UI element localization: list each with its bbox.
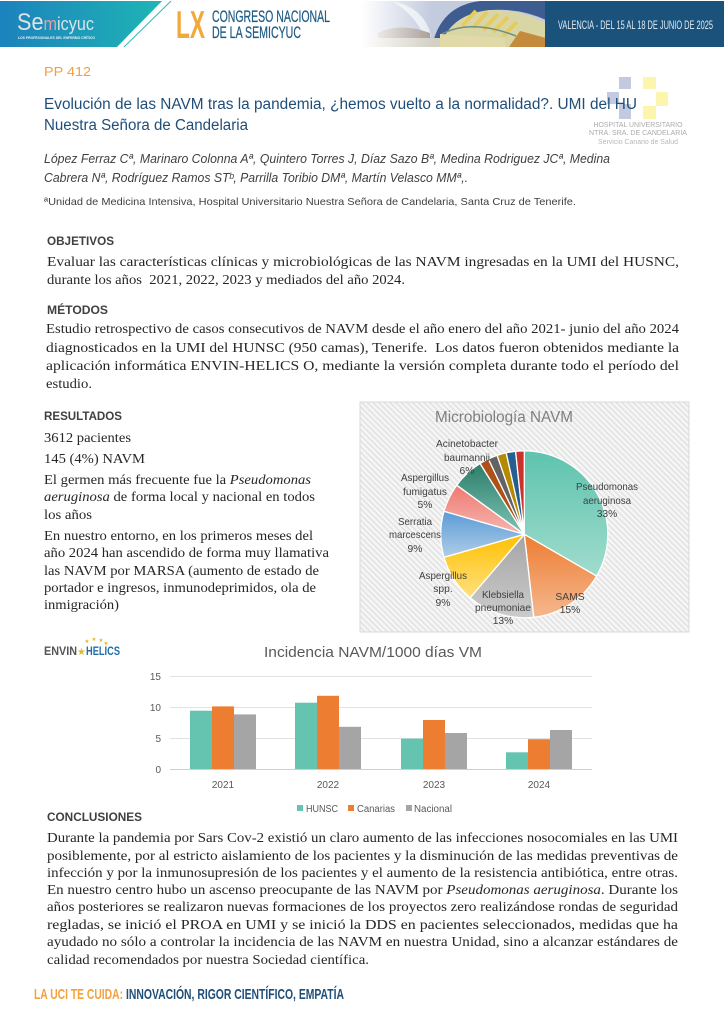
label: Klebsiella pneumoniae: pneumoniae: [475, 603, 531, 614]
chart legend: HUNSC: [306, 804, 338, 815]
label: Aspergillus fumigatus: Aspergillus: [401, 473, 449, 484]
conclusiones text: Durante la pandemia por Sars Cov-2 existió un claro aumento de las infecciones nosocomiales en las UMI: [47, 830, 679, 845]
conclusiones text: años posteriores se realizaron nuevas formaciones de los proyectos zero realizándose rondas de seguridad: [47, 899, 678, 914]
objetivos text: durante los años 2021, 2022, 2023 y mediados del año 2024.: [47, 272, 405, 287]
label: Aspergillus fumigatus: 5%: [418, 500, 432, 511]
label: Klebsiella pneumoniae: Klebsiella: [482, 590, 524, 601]
authors: Cabrera Nª, Rodríguez Ramos STᵇ, Parrilla Toribio DMª, Martín Velasco MMª,.: [44, 170, 468, 185]
conclusiones text: ayudado no sólo a controlar la incidencia de las NAVM en nuestra Unidad, sino a alcanzar estándares de: [47, 934, 678, 949]
ENVIN-HELICS logo: ★: [92, 636, 96, 643]
y axis labels: 0: [155, 765, 161, 776]
conclusiones text: infección y por la inmunosupresión de los pacientes y el aumento de la resistencia antibiótica, entre otras.: [47, 865, 678, 880]
y axis labels: 10: [150, 703, 161, 714]
resultados text: 3612 pacientes: [44, 430, 131, 445]
resultados text: portador e ingresos, inmunodeprimidos, ola de: [44, 580, 316, 595]
resultados text: aeruginosa de forma local y nacional en todos: [44, 489, 315, 504]
label: Acinetobacter baumannii: baumannii: [444, 453, 490, 464]
label: Aspergillus spp.: spp.: [433, 584, 453, 595]
resultados text: 145 (4%) NAVM: [44, 451, 145, 466]
footer slogan: LA UCI TE CUIDA:: [34, 986, 123, 1003]
hospital logo: HOSPITAL UNIVERSITARIO: [594, 120, 683, 129]
ENVIN-HELICS logo: ENVIN: [44, 646, 77, 658]
label: Serratia marcescens: [389, 517, 441, 555]
label: Serratia marcescens: 9%: [408, 544, 422, 555]
congress name: CONGRESO NACIONAL: [212, 8, 330, 26]
x axis labels: 2024: [528, 780, 551, 791]
y axis labels: 5: [155, 734, 161, 745]
objetivos text: [47, 254, 679, 287]
ENVIN-HELICS logo: [44, 636, 120, 658]
label: Aspergillus fumigatus: fumigatus: [403, 487, 447, 498]
label: SAMS: SAMS: [555, 592, 585, 603]
resultados text: [44, 430, 329, 612]
heading: conclusiones: CONCLUSIONES: [47, 810, 142, 824]
ENVIN-HELICS logo: HELICS: [86, 646, 120, 658]
resultados text: los años: [44, 507, 92, 522]
bar chart title: Incidencia NAVM/1000 días VM: [264, 644, 482, 661]
congress LX mark: LX: [176, 4, 205, 47]
resultados text: En nuestro entorno, en los primeros meses del: [44, 528, 313, 543]
label: SAMS: [555, 592, 585, 616]
label: Aspergillus spp.: Aspergillus: [419, 571, 467, 582]
resultados text: El germen más frecuente fue la Pseudomonas: [44, 472, 311, 487]
footer slogan: INNOVACIÓN, RIGOR CIENTÍFICO, EMPATÍA: [126, 985, 344, 1003]
pie chart title: Microbiología NAVM: [435, 409, 573, 426]
label: Serratia marcescens: Serratia: [398, 517, 432, 528]
resultados text: inmigración): [44, 597, 119, 612]
label: Pseudomonas aeruginosa: 33%: [597, 509, 617, 520]
header date panel: [545, 1, 724, 47]
congress name: [212, 8, 330, 42]
label: Acinetobacter baumannii: [436, 439, 499, 477]
ENVIN-HELICS logo: ★: [104, 640, 108, 647]
objetivos text: Evaluar las características clínicas y microbiológicas de las NAVM ingresadas en la UMI del HUSNC,: [47, 254, 679, 269]
heading: metodos: MÉTODOS: [47, 302, 108, 317]
label: Aspergillus spp.: [419, 571, 467, 609]
resultados text: las NAVM por MARSA (aumento de estado de: [44, 563, 319, 578]
label: Pseudomonas aeruginosa: [576, 482, 638, 520]
pie slices: [441, 451, 608, 618]
y axis labels: 15: [150, 672, 161, 683]
title: [44, 96, 637, 134]
Valencia architecture image: [362, 1, 546, 47]
authors: López Ferraz Cª, Marinaro Colonna Aª, Quintero Torres J, Díaz Sazo Bª, Medina Rodriguez JCª, Medina: [44, 151, 610, 166]
heading: resultados: RESULTADOS: [44, 409, 122, 423]
x axis labels: 2021: [212, 780, 235, 791]
metodos text: Estudio retrospectivo de casos consecutivos de NAVM desde el año enero del año 2021- junio del año 2024: [46, 321, 679, 336]
poster code: PP 412: [44, 64, 91, 79]
header teal diagonal line: [124, 1, 171, 47]
label: Aspergillus fumigatus: [401, 473, 449, 511]
ENVIN-HELICS logo: ★: [77, 647, 86, 658]
metodos text: [46, 321, 679, 391]
x axis labels: 2023: [423, 780, 446, 791]
affiliation: ªUnidad de Medicina Intensiva, Hospital Universitario Nuestra Señora de Candelaria, Santa Cruz de Tenerife.: [44, 196, 576, 208]
label: Acinetobacter baumannii: 6%: [460, 466, 474, 477]
label: Pseudomonas aeruginosa: aeruginosa: [583, 496, 631, 507]
conclusiones text: En nuestro centro hubo un ascenso preocupante de las NAVM por Pseudomonas aeruginosa . Durante los: [47, 882, 678, 897]
title: Nuestra Señora de Candelaria: [44, 117, 248, 134]
bars 2022: [295, 696, 361, 769]
metodos text: diagnosticados en la UMI del HUNSC (950 camas), Tenerife. Los datos fueron obtenidos mediante la: [46, 340, 679, 355]
conclusiones text: posiblemente, por al estricto aislamiento de los pacientes y la disminución de las medidas preventivas de: [47, 848, 678, 863]
heading: objetivos: OBJETIVOS: [47, 234, 114, 248]
metodos text: aplicación informática ENVIN-HELICS O, mediante la versión completa durante todo el período del: [46, 358, 679, 373]
congress name: DE LA SEMICYUC: [212, 24, 301, 42]
hospital logo: Servicio Canario de Salud: [598, 137, 678, 146]
x axis labels: [212, 780, 551, 791]
label: Aspergillus spp.: 9%: [436, 598, 450, 609]
label: Serratia marcescens: marcescens: [389, 530, 441, 541]
metodos text: estudio.: [46, 376, 92, 391]
header blue logo panel: [0, 1, 162, 47]
bar chart incidencia: [150, 644, 592, 815]
authors: [44, 151, 610, 185]
Semicyuc logo: LOS PROFESIONALES DEL ENFERMO CRÍTICO: [18, 35, 95, 40]
y axis labels: [150, 672, 161, 776]
ENVIN-HELICS logo: ★: [84, 638, 90, 645]
chart legend: Nacional: [414, 804, 452, 815]
conclusiones text: regladas, se inició el PROA en UMI y se inició la DDS en pacientes seleccionados, medidas que ha: [47, 917, 678, 932]
conclusiones text: calidad recomendados por nuestra Sociedad científica.: [47, 952, 369, 967]
bars 2024: [506, 730, 572, 769]
conclusiones text: [47, 830, 679, 967]
label: Klebsiella pneumoniae: [475, 590, 531, 627]
x axis labels: 2022: [317, 780, 340, 791]
panel: pie chart microbiologia: [360, 402, 689, 632]
resultados text: año 2024 han ascendido de forma muy llamativa: [44, 545, 329, 560]
chart legend: Canarias: [357, 804, 395, 815]
label: Klebsiella pneumoniae: 13%: [493, 616, 513, 627]
label: Pseudomonas aeruginosa: Pseudomonas: [576, 482, 638, 493]
Semicyuc logo: Semicyuc: [17, 9, 94, 36]
chart legend: [297, 804, 452, 815]
bars 2023: [401, 720, 467, 769]
label: Acinetobacter baumannii: Acinetobacter: [436, 439, 499, 450]
hospital logo: [589, 77, 687, 146]
bars 2021: [190, 706, 256, 769]
hospital logo: NTRA. SRA. DE CANDELARIA: [589, 128, 687, 137]
title: Evolución de las NAVM tras la pandemia, ¿hemos vuelto a la normalidad?. UMI del HU: [44, 96, 637, 113]
header banner: [0, 1, 724, 47]
footer slogan: [34, 985, 344, 1003]
label: SAMS: 15%: [560, 605, 580, 616]
ENVIN-HELICS logo: ★: [98, 637, 104, 644]
